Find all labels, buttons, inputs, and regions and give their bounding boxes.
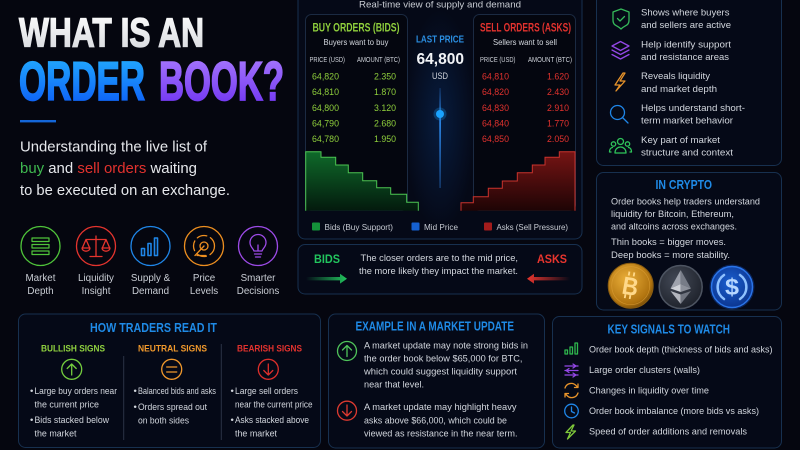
panel: example in a market update: near that level. — [364, 380, 424, 390]
column: bearish signs: near the current price — [235, 400, 312, 410]
panel: why it matters: and market depth — [641, 84, 717, 95]
panel: buy orders — [306, 14, 418, 211]
panel: buy orders: PRICE (USD) — [310, 55, 345, 64]
panel: in crypto: IN CRYPTO — [656, 178, 712, 192]
panel: sell orders: 64,810 — [482, 72, 509, 82]
title — [19, 10, 284, 112]
panel: bids vs asks callout — [298, 244, 582, 294]
panel: buy orders: 1.950 — [374, 134, 396, 145]
panel: in crypto: liquidity for Bitcoin, Ethereum, — [611, 209, 734, 220]
icon: price levels target — [184, 226, 224, 266]
panel: in crypto: and altcoins across exchanges. — [611, 222, 737, 232]
panel: bids vs asks callout: The closer orders are to the mid price, — [360, 253, 518, 264]
icon row: Insight — [82, 286, 111, 297]
title: BOOK? — [159, 50, 284, 112]
legend: Asks (Sell Pressure) — [496, 222, 568, 232]
column: neutral signs: on both sides — [138, 416, 189, 426]
column: bearish signs — [230, 344, 312, 440]
panel: example in a market update: EXAMPLE IN A MARKET UPDATE — [356, 320, 514, 334]
panel: sell orders: 1.620 — [547, 72, 569, 82]
column: bearish signs: Large sell orders — [235, 386, 298, 397]
panel: bids vs asks callout: BIDS — [314, 252, 340, 266]
icon: market depth — [21, 226, 60, 266]
panel: buy orders: 3.120 — [374, 103, 396, 114]
column: neutral signs: Orders spread out — [138, 402, 207, 413]
panel: key signals to watch: Speed of order additions and removals — [589, 427, 747, 438]
panel: key signals to watch: Large order clusters (walls) — [589, 365, 700, 376]
panel: key signals to watch: KEY SIGNALS TO WATCH — [608, 322, 730, 336]
panel: example in a market update: A market update may highlight heavy — [364, 402, 517, 413]
column: bearish signs: the market — [235, 428, 277, 440]
panel: buy orders: 64,790 — [312, 118, 339, 130]
panel: sell orders — [461, 14, 576, 211]
column: bullish signs: Large buy orders near — [34, 386, 117, 397]
title: WHAT IS AN — [19, 10, 204, 56]
panel: sell orders: SELL ORDERS (ASKS) — [480, 22, 571, 34]
panel: why it matters: and sellers are active — [641, 20, 731, 31]
icon: lightning — [615, 73, 625, 91]
icon: refresh — [565, 383, 578, 398]
arrow: bids — [306, 274, 347, 284]
icon: liquidity scales — [76, 226, 116, 266]
subtitle — [20, 138, 230, 199]
icon row: Liquidity — [78, 273, 114, 284]
panel: example in a market update: A market update may note strong bids in — [364, 340, 528, 351]
column: bearish signs: Asks stacked above — [235, 415, 309, 426]
panel: sell orders: 64,850 — [482, 134, 509, 145]
icon row: Smarter — [241, 273, 276, 284]
panel: sell orders: 64,840 — [482, 118, 509, 130]
column: neutral signs: Balanced bids and asks — [138, 386, 216, 397]
panel: example in a market update: viewed as resistance in the near term. — [364, 428, 518, 440]
icon row: Depth — [27, 286, 54, 297]
subtitle: to be executed on an exchange. — [20, 182, 230, 199]
column: bullish signs: the current price — [34, 400, 99, 410]
column: neutral signs: • — [134, 402, 137, 413]
subtitle: Understanding the live list of — [20, 138, 208, 156]
panel: buy orders: Buyers want to buy — [324, 37, 389, 47]
panel: sell orders: 2.050 — [547, 134, 569, 145]
icon: usd coin: $ — [725, 274, 739, 300]
legend — [312, 222, 568, 232]
panel: why it matters — [596, 0, 782, 166]
column: neutral signs: • — [134, 386, 137, 397]
column: bullish signs: • — [30, 415, 33, 426]
column: bearish signs: • — [230, 415, 234, 426]
icon: order clusters — [565, 364, 578, 377]
column: bullish signs: Bids stacked below — [34, 415, 109, 426]
panel: example in a market update: which could suggest liquidity support — [363, 366, 517, 378]
panel: key signals to watch: Order book depth (thickness of bids and asks) — [589, 344, 772, 355]
icon: layers — [612, 42, 629, 59]
panel: buy orders: 64,780 — [312, 134, 339, 145]
panel: bids vs asks callout: ASKS — [537, 252, 567, 266]
panel: why it matters: Helps understand short- — [641, 103, 745, 114]
panel: buy orders: 1.870 — [374, 87, 396, 98]
panel: sell orders: 2.910 — [547, 103, 569, 114]
icon: supply and demand bars — [131, 226, 170, 266]
chart: ask depth — [461, 152, 575, 211]
panel: buy orders: AMOUNT (BTC) — [357, 55, 400, 64]
icon: ethereum coin — [659, 266, 702, 308]
icon: clock — [565, 404, 578, 418]
chart: bid depth — [306, 152, 418, 211]
column: bullish signs — [30, 344, 117, 440]
panel: sell orders: 1.770 — [547, 118, 569, 130]
icon row: Supply & — [131, 273, 171, 284]
panel: key signals to watch: Order book imbalance (more bids vs asks) — [589, 406, 759, 417]
panel: sell orders: 64,830 — [482, 103, 509, 114]
center glow — [404, 10, 476, 230]
legend: Bids (Buy Support) — [324, 222, 393, 232]
column: neutral signs — [134, 344, 216, 426]
column: bullish signs: • — [30, 386, 33, 397]
arrow: asks — [527, 274, 570, 284]
last price: USD — [432, 71, 448, 81]
icon: bitcoin coin — [608, 263, 653, 308]
mid price marker — [434, 88, 446, 188]
panel: how traders read it: HOW TRADERS READ IT — [90, 321, 217, 335]
panel: why it matters: Key part of market — [641, 135, 720, 146]
panel: buy orders: 2.350 — [374, 72, 396, 82]
panel: buy orders: 64,820 — [312, 72, 339, 82]
last price — [416, 34, 464, 81]
icon: bitcoin coin: B — [620, 272, 641, 302]
panel: buy orders: 64,800 — [312, 103, 339, 114]
column: bullish signs: the market — [34, 428, 77, 440]
panel: why it matters: Help identify support — [641, 40, 731, 50]
panel: sell orders: PRICE (USD) — [480, 55, 516, 64]
icon row: Demand — [132, 286, 169, 297]
panel: in crypto: Deep books = more stability. — [611, 250, 730, 261]
column: bearish signs: BEARISH SIGNS — [237, 344, 302, 355]
icon: down arrow — [338, 401, 356, 420]
panel: live order book — [298, 0, 582, 239]
panel: sell orders: 2.430 — [547, 87, 569, 98]
panel: why it matters: structure and context — [641, 148, 733, 158]
panel: why it matters: and resistance areas — [641, 52, 729, 63]
panel: why it matters: term market behavior — [641, 116, 733, 126]
panel: bids vs asks callout: the more likely they impact the market. — [359, 266, 518, 277]
panel: why it matters: Reveals liquidity — [641, 71, 710, 82]
panel: in crypto: Thin books = bigger moves. — [611, 237, 726, 248]
panel: in crypto: Order books help traders understand — [611, 196, 760, 208]
icon row: Decisions — [237, 286, 279, 297]
last price: LAST PRICE — [416, 34, 464, 46]
icon: smarter decisions bulb — [238, 226, 278, 266]
panel: in crypto — [596, 172, 782, 310]
panel: sell orders: AMOUNT (BTC) — [528, 55, 572, 64]
icon: usd coin — [710, 264, 754, 310]
icon: speed bolt — [566, 425, 576, 439]
icon: depth bars — [565, 343, 578, 354]
panel: example in a market update: the order book below $65,000 for BTC, — [364, 354, 522, 364]
panel: example in a market update: asks above $66,000, which could be — [364, 415, 507, 426]
panel: key signals to watch — [552, 316, 782, 448]
panel: buy orders: 2.680 — [374, 118, 396, 130]
panel: how traders read it — [18, 314, 320, 448]
panel: sell orders: 64,820 — [482, 87, 509, 98]
panel: example in a market update — [328, 314, 544, 448]
title: ORDER — [19, 50, 145, 112]
icon: magnifier — [610, 106, 628, 123]
icon: up arrow — [338, 342, 356, 360]
panel: buy orders: BUY ORDERS (BIDS) — [312, 22, 400, 34]
icon row — [21, 226, 279, 297]
icon row: Levels — [190, 286, 218, 297]
icon: shield — [613, 9, 629, 29]
subtitle: buy and sell orders waiting — [20, 160, 197, 177]
icon: people — [610, 138, 632, 153]
icon row: Market — [26, 273, 56, 284]
panel: why it matters: Shows where buyers — [641, 8, 730, 19]
icon row: Price — [193, 273, 216, 284]
column: bullish signs: BULLISH SIGNS — [41, 344, 105, 355]
legend: Mid Price — [424, 222, 458, 232]
panel: sell orders: Sellers want to sell — [493, 37, 557, 47]
column: neutral signs: NEUTRAL SIGNS — [138, 344, 207, 355]
panel: buy orders: 64,810 — [312, 87, 339, 98]
panel: key signals to watch: Changes in liquidity over time — [589, 386, 709, 397]
column: bearish signs: • — [230, 386, 234, 397]
last price: 64,800 — [416, 51, 464, 68]
